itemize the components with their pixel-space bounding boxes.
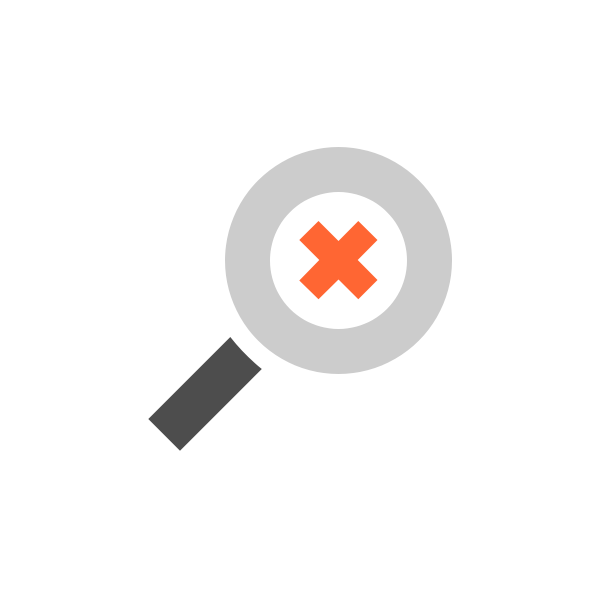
orange X mark: [299, 221, 378, 299]
magnifier lens ring: [225, 147, 452, 374]
magnifier handle: [148, 337, 262, 451]
